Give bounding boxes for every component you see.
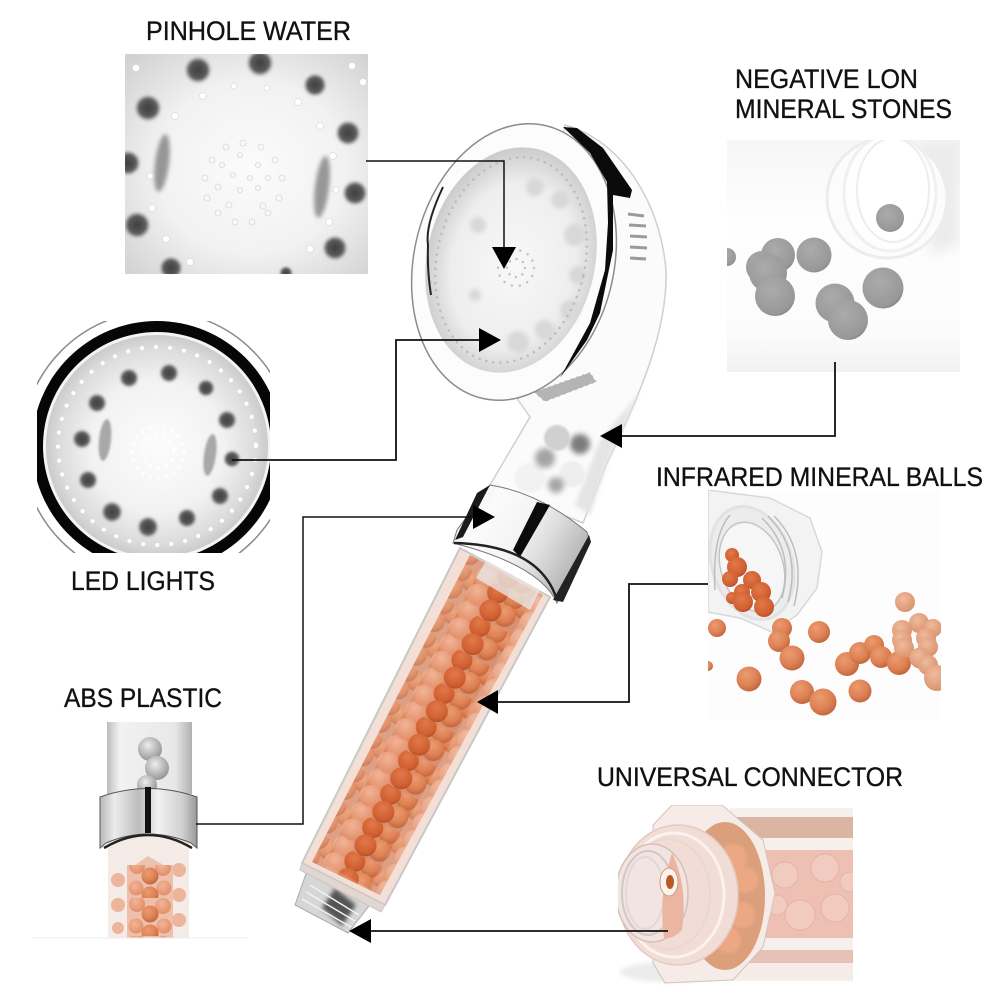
arrow: LED lights to head <box>232 328 501 460</box>
face rim holes <box>416 142 606 378</box>
black top band <box>560 127 632 378</box>
face spots <box>469 178 587 353</box>
orange balls, inner chamber <box>324 562 536 888</box>
panel: infrared balls photo <box>708 490 941 716</box>
slots <box>628 214 647 259</box>
panel: ABS plastic close-up <box>32 722 248 938</box>
heading: LED lights: LED LIGHTS <box>71 566 215 596</box>
filter tube <box>302 548 550 905</box>
heading: pinhole water: PINHOLE WATER <box>146 16 351 46</box>
arrow: mineral stones to neck <box>600 362 835 448</box>
orange balls, outer glass <box>312 555 543 895</box>
chrome collar <box>453 485 591 603</box>
tube foot rim <box>300 863 385 912</box>
panel: LED lights close-up <box>37 321 270 553</box>
clear handle body <box>490 125 666 523</box>
chrome ring <box>385 103 643 421</box>
heading: negative ion mineral stones <box>735 64 952 124</box>
left inner rim <box>428 187 443 295</box>
mesh at top of tube <box>476 560 540 610</box>
threaded connector <box>295 868 372 933</box>
face centre holes <box>498 250 534 286</box>
chrome rib strip <box>533 372 597 402</box>
arrow: ABS plastic to collar <box>196 505 495 824</box>
heading: ABS plastic: ABS PLASTIC <box>64 683 222 713</box>
heading: negative ion mineral stones: MINERAL STONES <box>735 94 952 124</box>
panel: pinhole water close-up <box>115 49 368 280</box>
panel: mineral stones photo <box>718 135 960 372</box>
arrow: pinhole water to head <box>366 161 516 269</box>
head face <box>404 130 618 390</box>
heading: negative ion mineral stones: NEGATIVE LON <box>735 64 918 94</box>
panel: universal connector photo <box>616 805 860 983</box>
neck shading <box>575 392 640 515</box>
arrow: infrared balls to tube <box>477 584 708 714</box>
heading: universal connector: UNIVERSAL CONNECTOR <box>597 762 903 792</box>
mineral balls in the neck <box>515 425 590 493</box>
arrow: connector to thread <box>349 919 668 943</box>
shower head product <box>295 103 666 933</box>
